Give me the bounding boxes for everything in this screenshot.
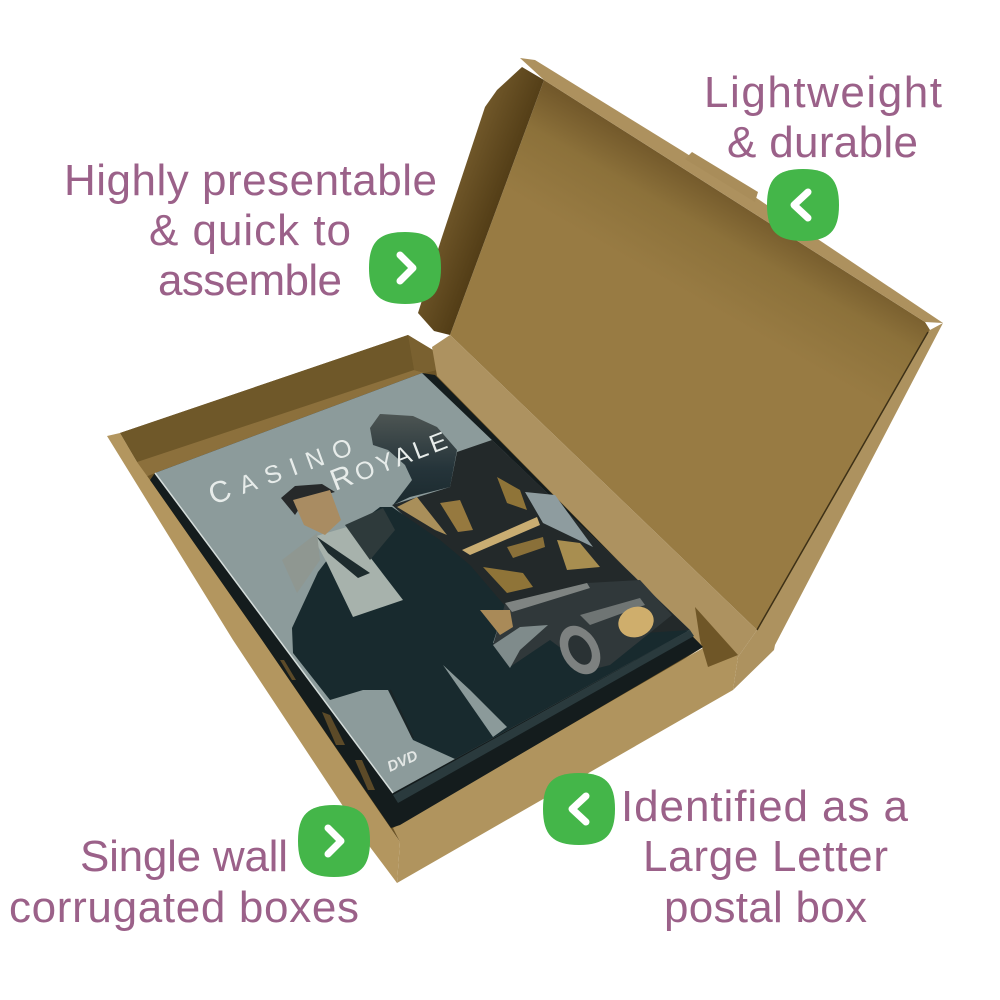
DVD logo: DVD [385, 747, 421, 776]
label: large letter: Large Letter [643, 832, 888, 881]
front wall [393, 648, 738, 883]
hand [480, 610, 513, 635]
front lip [393, 630, 694, 803]
film title: ROYALE [326, 423, 451, 498]
age rating [614, 602, 658, 642]
shoulder [345, 508, 395, 560]
DVD case [150, 373, 703, 828]
label: large letter: postal box [664, 883, 867, 932]
label: single wall: corrugated boxes [9, 883, 359, 932]
label: lightweight [704, 68, 942, 167]
back wall [120, 335, 414, 462]
film title: CASINO [204, 429, 356, 512]
label: single wall: Single wall [80, 832, 288, 881]
gun leg gap [443, 665, 507, 737]
icon: right chevron single wall [298, 805, 370, 877]
sports car [493, 580, 672, 682]
right inner wall [408, 335, 445, 373]
label: presentable [64, 156, 437, 305]
casino building [392, 440, 690, 640]
lid locking tab [685, 152, 758, 202]
film silhouette [370, 414, 457, 505]
cover background [155, 373, 690, 793]
icon: left chevron lightweight [767, 169, 839, 241]
man's face [293, 490, 341, 535]
lid right edge strip [733, 323, 943, 690]
white edge [155, 473, 393, 793]
label: presentable: & quick to [149, 206, 351, 255]
lid inner panel [450, 80, 930, 630]
left wall [107, 433, 400, 883]
lid top edge strip [520, 58, 943, 323]
panel edge line [757, 332, 928, 630]
back ledge [137, 370, 425, 478]
lid left side flap [418, 67, 544, 335]
suit figure [292, 507, 690, 759]
hinge strip [432, 335, 757, 668]
label: large letter [621, 782, 909, 932]
box base [107, 335, 757, 883]
label: presentable: Highly presentable [64, 156, 437, 205]
tuck flap [695, 607, 738, 667]
label: large letter: Identified as a [621, 782, 909, 831]
label: single wall [9, 832, 359, 932]
icon: right chevron presentable [369, 232, 441, 304]
bow tie [317, 537, 370, 578]
base floor shadow [120, 335, 703, 842]
left sleeve [282, 533, 320, 593]
film title [204, 423, 451, 512]
label: lightweight: Lightweight [704, 68, 942, 117]
label: lightweight: & durable [727, 118, 918, 167]
label: presentable: assemble [158, 256, 342, 305]
open box lid [418, 58, 943, 690]
man's shirt [313, 527, 403, 617]
pistol line [390, 690, 413, 738]
spine print [280, 660, 375, 790]
man's hair [281, 484, 335, 515]
icon: left chevron large letter [543, 773, 615, 845]
case body [150, 373, 703, 828]
